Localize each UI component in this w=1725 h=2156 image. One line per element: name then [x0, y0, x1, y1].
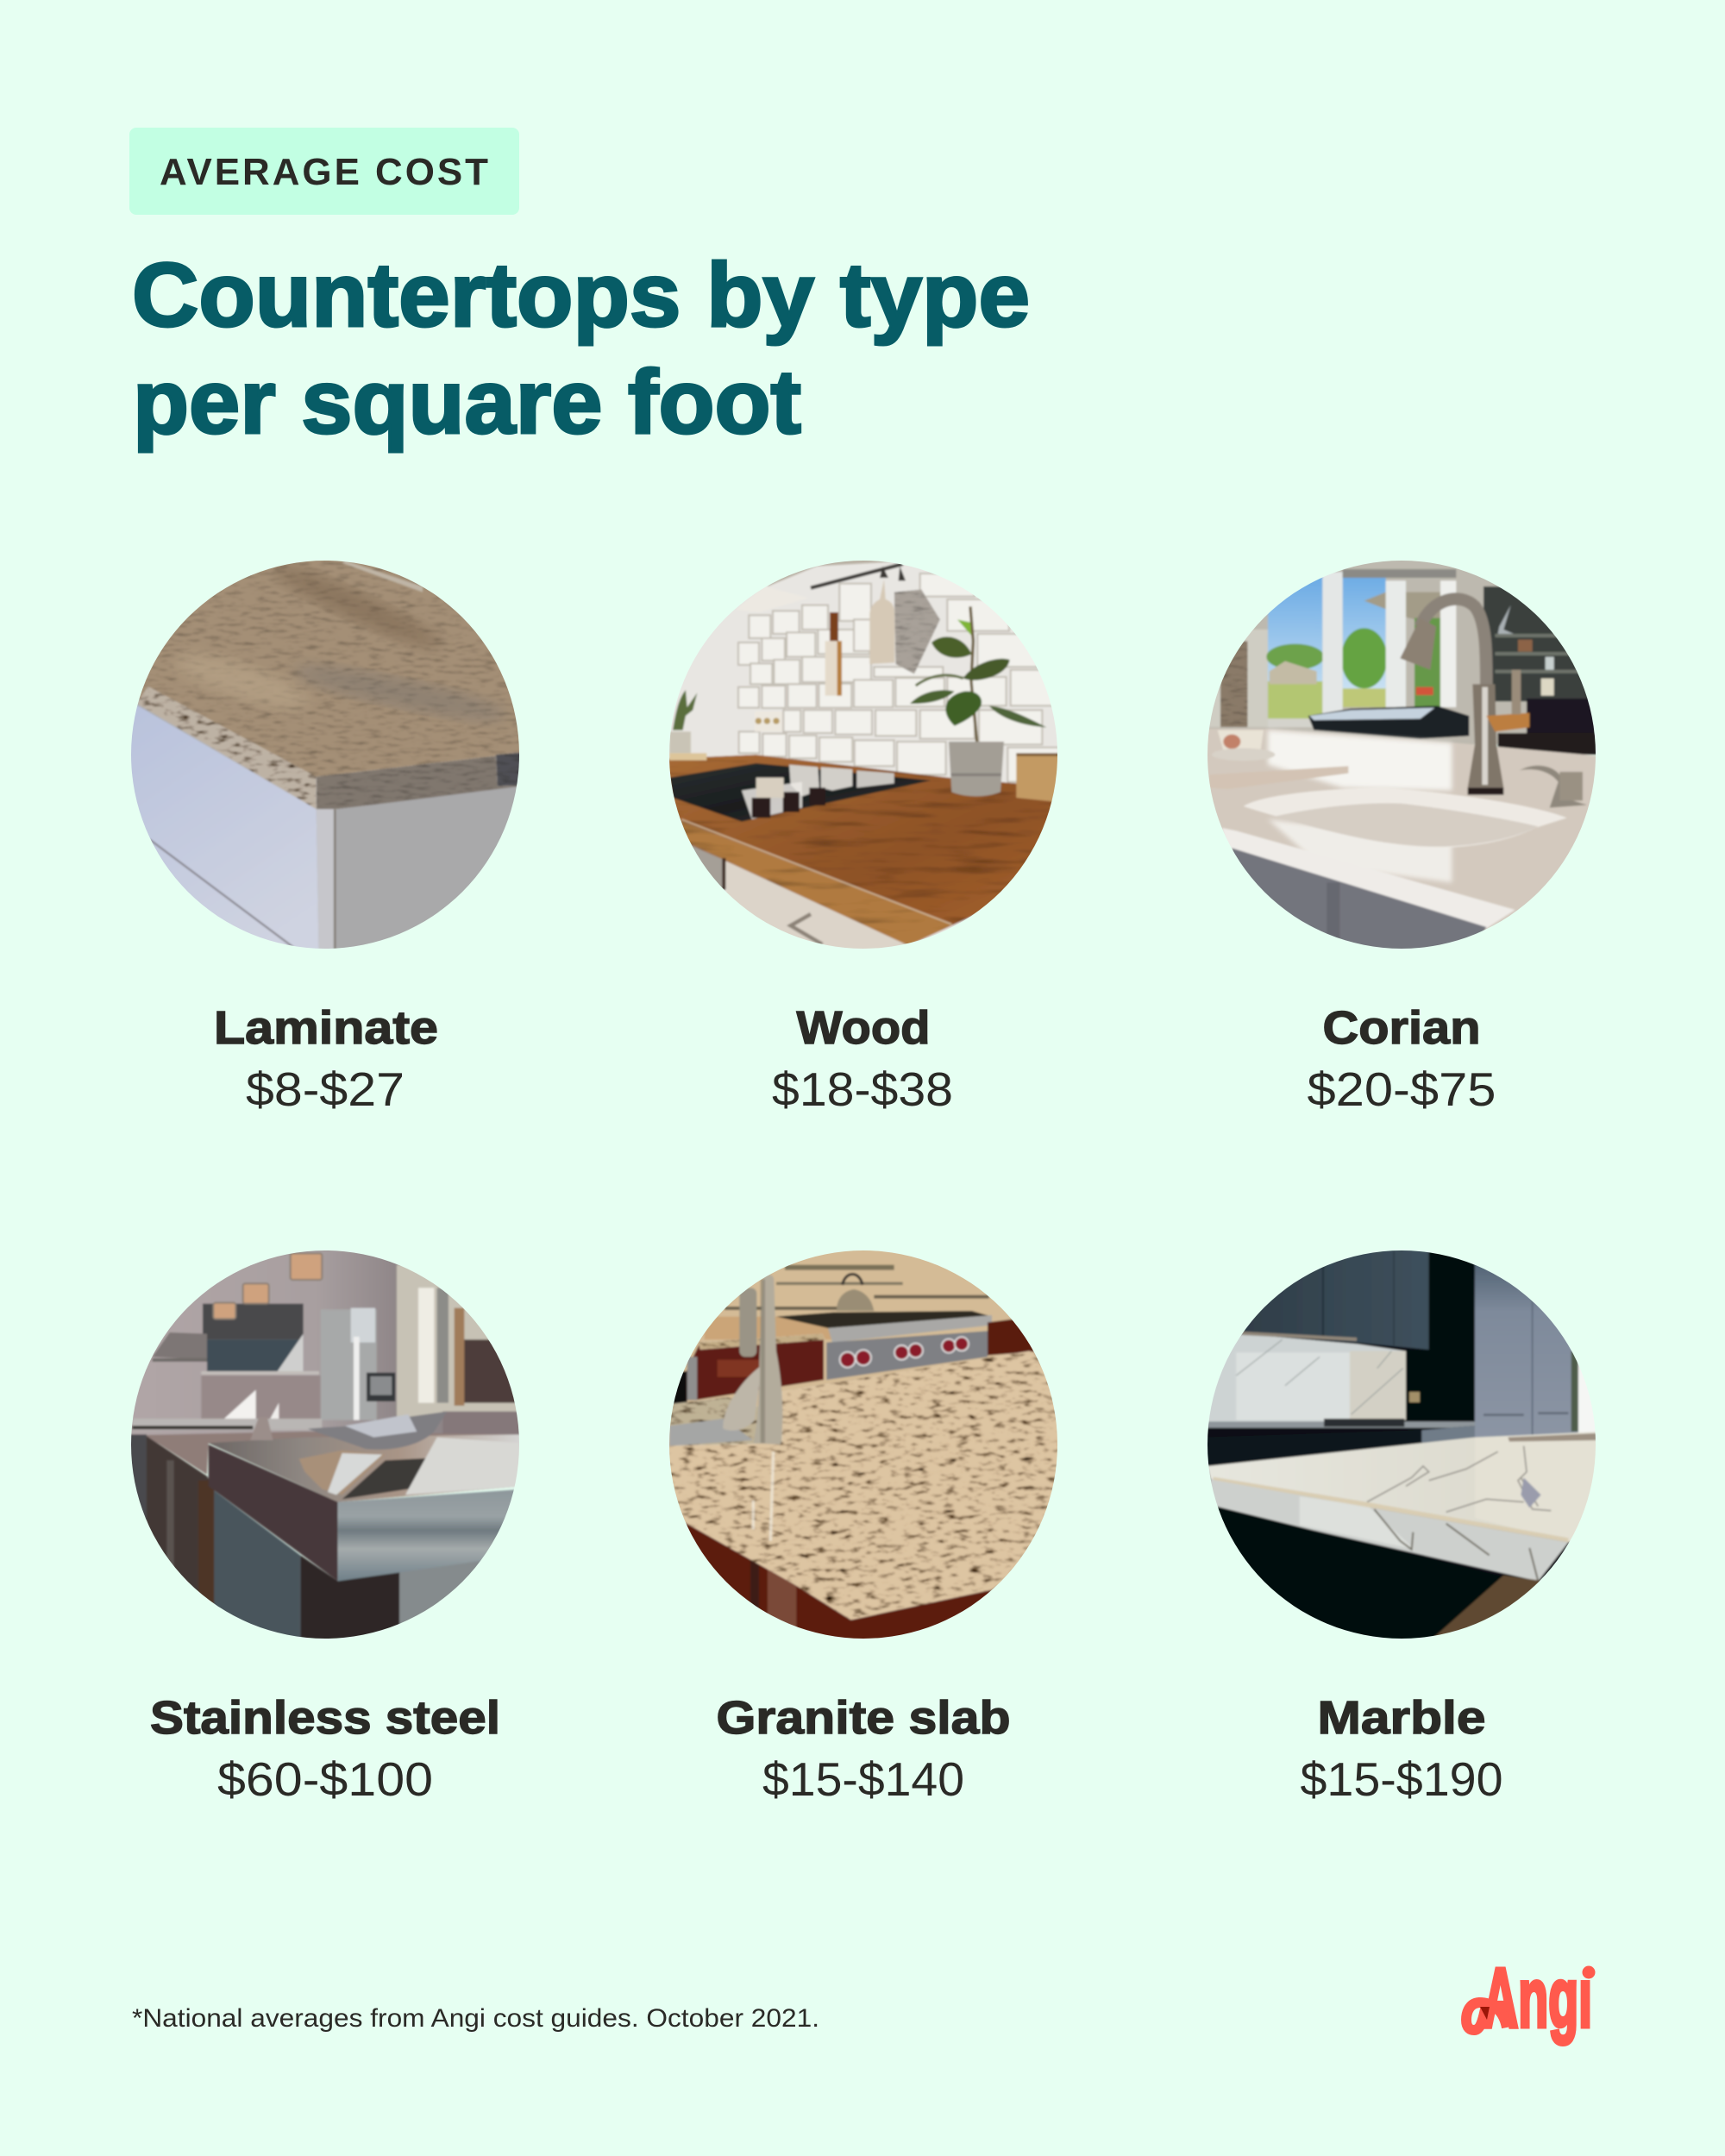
label: corian: [1308, 1002, 1496, 1116]
label: laminate: Laminate: [214, 1002, 438, 1054]
dark base and wood floor: [1216, 1507, 1544, 1673]
footnote: *National averages from Angi cost guides. October 2021.: [132, 2004, 819, 2033]
right tall cabinets: [1475, 1242, 1607, 1443]
lower cabinet front: [685, 1521, 996, 1639]
tile backsplash: [705, 1265, 989, 1339]
windows: [1266, 569, 1456, 727]
logo: Angi: [1466, 1951, 1599, 2045]
photo: corian countertop: [1208, 561, 1596, 949]
sink: [1244, 787, 1567, 848]
sofa: [1308, 699, 1613, 755]
corian counter: [1208, 728, 1596, 949]
backsplash highlights: [132, 1376, 529, 1436]
granite slab: [669, 1351, 1087, 1620]
title: Countertops by type: [132, 245, 1030, 346]
hanging utensils: [811, 564, 940, 696]
cabinet panels: [131, 705, 517, 949]
tag: average cost: [129, 128, 519, 215]
laminate top surface: [140, 561, 519, 778]
laminate edge band: [138, 686, 543, 809]
label: stainless steel: $60-$100: [217, 1752, 433, 1806]
label: wood: Wood: [797, 1002, 930, 1054]
tag: average cost: AVERAGE COST: [160, 151, 491, 193]
label: marble: [1301, 1692, 1502, 1806]
cherry cabinets: [674, 1318, 1034, 1406]
label: granite slab: [716, 1692, 1011, 1806]
island side panels: [131, 1433, 514, 1639]
hood and upper cabinet: [153, 1304, 319, 1375]
photo: granite slab countertop: [669, 1250, 1057, 1639]
label: stainless steel: [150, 1692, 500, 1806]
stainless steel island top: [145, 1412, 524, 1502]
bookshelf: [1482, 585, 1588, 703]
socket: [754, 717, 781, 732]
title: per square foot: [133, 352, 801, 453]
label: laminate: [214, 1002, 438, 1116]
label: laminate: $8-$27: [246, 1062, 405, 1116]
sink edge: [669, 1419, 753, 1446]
label: marble: $15-$190: [1301, 1752, 1502, 1806]
windows: [395, 1264, 517, 1418]
upper cabinets: [1227, 1242, 1475, 1425]
logo: Angi: Angi: [1483, 1951, 1592, 2045]
wood counter: [669, 754, 1052, 944]
range: [776, 1311, 992, 1380]
photo: stainless steel countertop: [131, 1250, 519, 1639]
photo: wood countertop: [669, 561, 1057, 949]
rubber plant: [910, 606, 1046, 742]
fridge and monitor: [321, 1308, 395, 1420]
marble backsplash: [1208, 1332, 1420, 1426]
pot and cork box: [948, 740, 1057, 802]
marble island top: [1208, 1432, 1607, 1542]
label: marble: Marble: [1318, 1692, 1485, 1744]
gooseneck faucet: [723, 1275, 782, 1445]
label: granite slab: Granite slab: [716, 1692, 1011, 1744]
label: wood: $18-$38: [772, 1062, 953, 1116]
subway tiles: [738, 573, 1059, 782]
cup and board: [1212, 730, 1275, 761]
reflection: [753, 1451, 774, 1541]
cooktop: [670, 763, 931, 822]
label: granite slab: $15-$140: [762, 1752, 964, 1806]
label: wood: [772, 1002, 953, 1116]
pendant lights: [213, 1253, 322, 1319]
label: corian: $20-$75: [1308, 1062, 1496, 1116]
photo: laminate countertop: [131, 561, 519, 949]
label: stainless steel: Stainless steel: [150, 1692, 500, 1744]
label: corian: Corian: [1323, 1002, 1480, 1054]
left plant: [669, 690, 706, 761]
photo: marble countertop: [1208, 1250, 1596, 1639]
marble edge: [1208, 1477, 1568, 1581]
title: [132, 245, 1030, 453]
cabinets below: [692, 843, 906, 949]
back counter: [1208, 1419, 1475, 1464]
faucet: [1400, 599, 1587, 808]
